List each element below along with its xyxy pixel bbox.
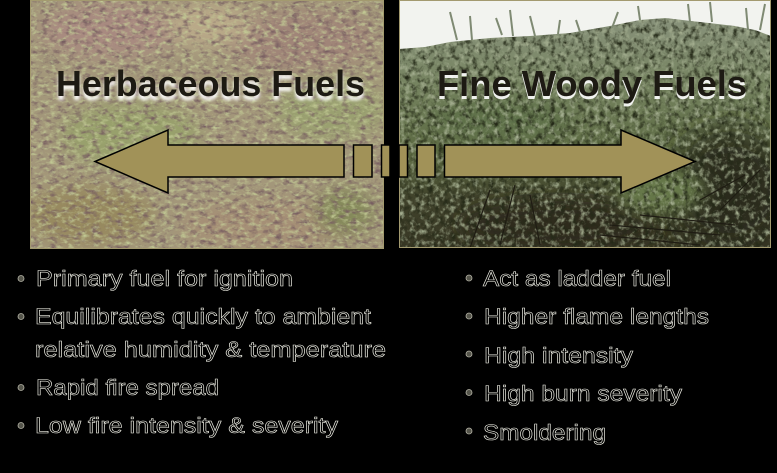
dark twigs bbox=[470, 170, 760, 248]
panel: herbaceous fuels photo bbox=[25, 0, 385, 249]
arrow: left towards herbaceous fuels bbox=[95, 130, 344, 193]
bullet list: herbaceous fuels: Equilibrates quickly to ambient bbox=[35, 304, 371, 329]
bullet list: fine woody fuels: High intensity bbox=[484, 343, 633, 368]
heading: herbaceous fuels: Herbaceous Fuels bbox=[56, 67, 365, 108]
arrow: dashed connector bbox=[354, 145, 435, 177]
bullet list: fine woody fuels bbox=[466, 266, 709, 445]
bullet list: fine woody fuels: Act as ladder fuel bbox=[483, 266, 671, 291]
plant stems against the sky bbox=[450, 2, 765, 40]
heading: fine woody fuels: Fine Woody Fuels bbox=[437, 66, 747, 107]
bullet list: herbaceous fuels: Rapid fire spread bbox=[36, 375, 219, 400]
sky bbox=[399, 0, 771, 49]
bullet list: herbaceous fuels bbox=[18, 266, 386, 438]
bullet list: herbaceous fuels: Low fire intensity & severity bbox=[35, 413, 338, 438]
bullet list: fine woody fuels: Smoldering bbox=[483, 420, 606, 445]
panel: fine woody fuels photo bbox=[399, 0, 777, 250]
bullet list: fine woody fuels: Higher flame lengths bbox=[484, 304, 709, 329]
bullet list: fine woody fuels: High burn severity bbox=[484, 381, 682, 406]
heading: herbaceous fuels: Herbaceous Fuels bbox=[56, 63, 365, 104]
arrow: right towards fine woody fuels bbox=[444, 130, 695, 193]
heading: fine woody fuels: Fine Woody Fuels bbox=[437, 63, 747, 104]
bullet list: herbaceous fuels: relative humidity & temperature bbox=[35, 337, 386, 362]
bullet list: herbaceous fuels: Primary fuel for ignition bbox=[36, 266, 293, 291]
